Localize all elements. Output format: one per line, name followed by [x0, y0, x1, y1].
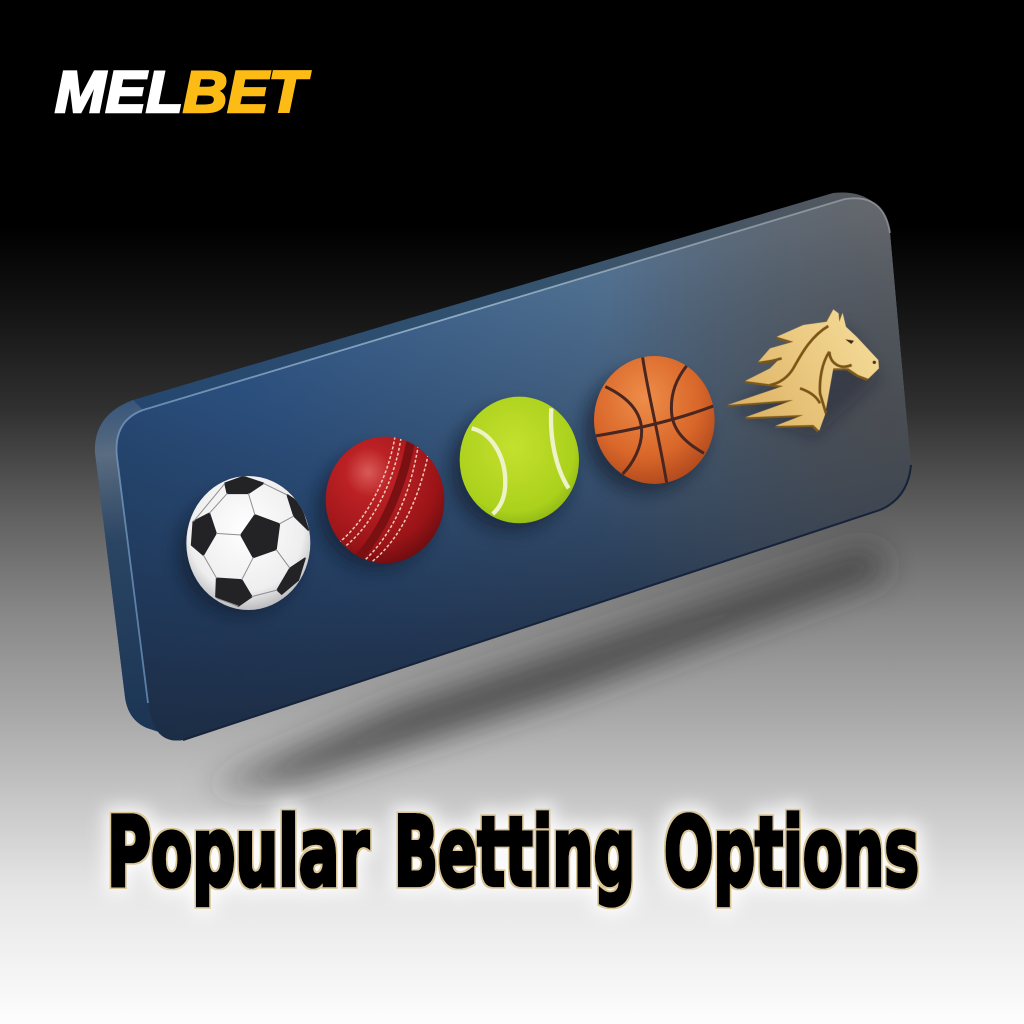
- title: Popular: [107, 798, 369, 908]
- panel lower edge: [183, 465, 911, 740]
- panel front face: [117, 198, 910, 741]
- panel left side: [95, 400, 183, 741]
- panel body edge: [95, 192, 910, 740]
- panel grey tint: [117, 198, 910, 741]
- logo: MELBET: MEL: [55, 60, 183, 125]
- icon: basketball: [594, 356, 715, 484]
- horse eye: [845, 339, 854, 344]
- icon: golden horse: [726, 309, 879, 433]
- blue tilted panel: [95, 192, 911, 741]
- title: Betting: [394, 798, 635, 908]
- panel shading: [117, 198, 910, 741]
- horse nostril: [873, 361, 876, 364]
- panel floor shadow: [205, 548, 890, 790]
- icon: soccer ball: [186, 476, 310, 610]
- icon: cricket ball: [326, 437, 444, 563]
- icon: tennis ball: [460, 397, 579, 523]
- ball shadows: [178, 325, 880, 615]
- title: [107, 798, 919, 908]
- logo: MELBET: BET: [183, 60, 311, 125]
- panel highlight line: [117, 198, 890, 703]
- logo: MELBET: [55, 60, 311, 125]
